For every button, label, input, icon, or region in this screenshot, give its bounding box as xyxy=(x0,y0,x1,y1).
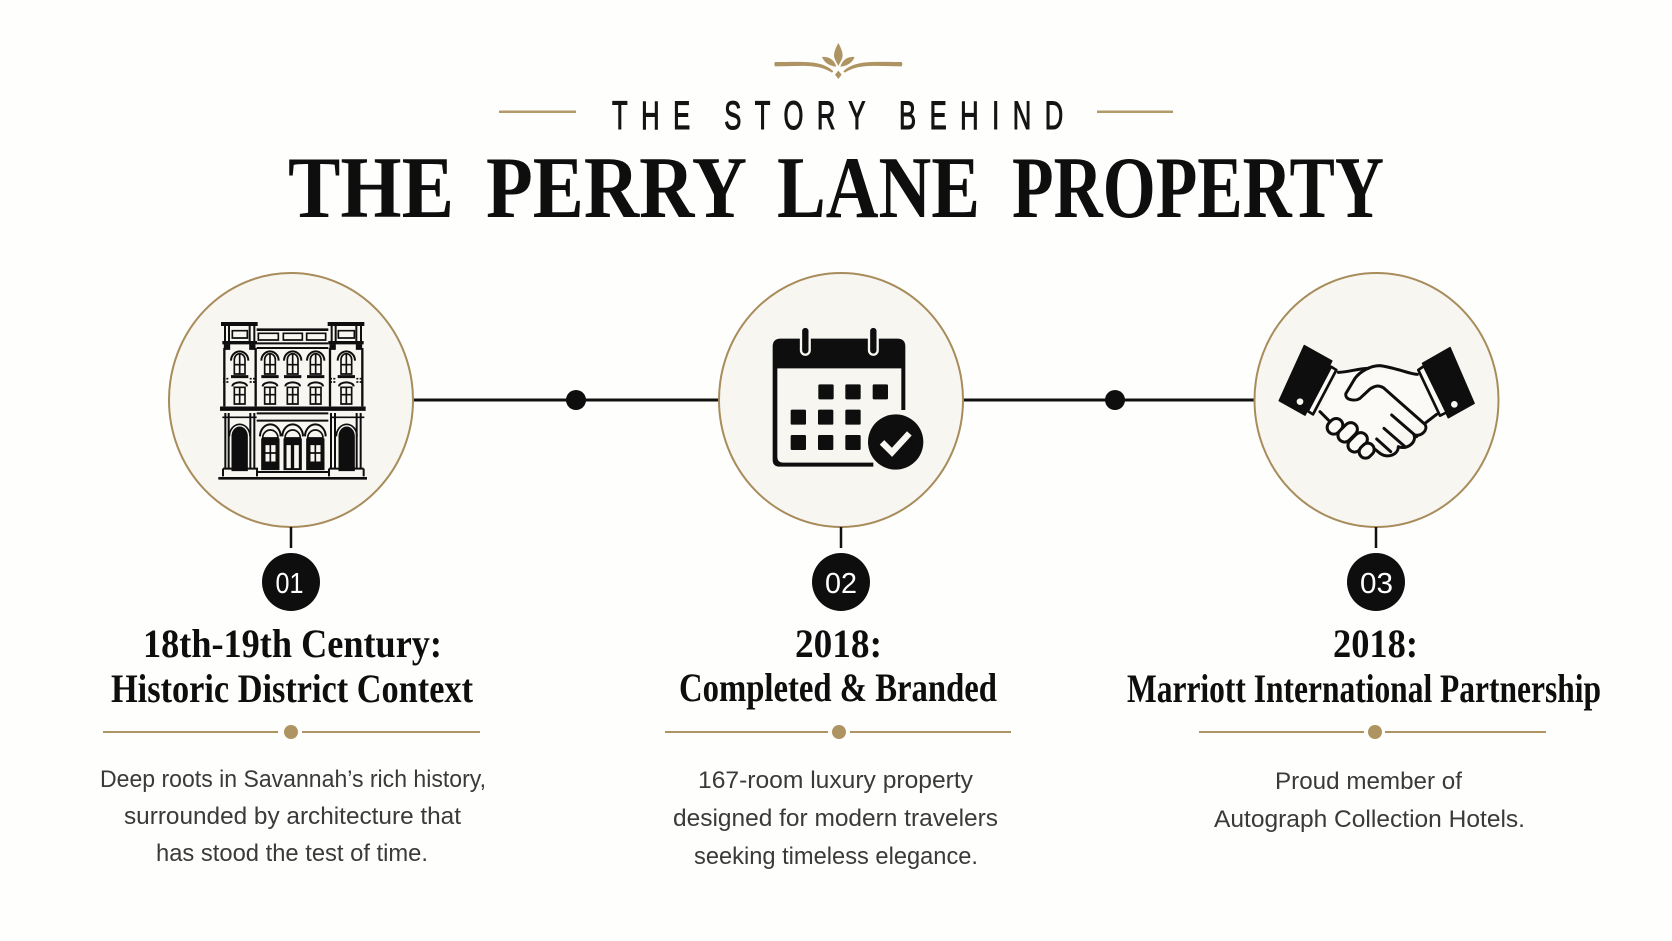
heading xyxy=(111,621,474,711)
panel: step 3 marriott partnership xyxy=(1127,273,1601,833)
icon circle: building xyxy=(169,273,413,527)
title: THE xyxy=(288,140,454,237)
description: surrounded by architecture that xyxy=(124,803,461,830)
description xyxy=(1214,768,1525,833)
icon circle: handshake xyxy=(1254,273,1498,527)
description: seeking timeless elegance. xyxy=(694,843,978,870)
description xyxy=(673,767,998,870)
divider xyxy=(103,725,480,739)
icon circle: calendar xyxy=(719,273,963,527)
number badge 02: 02 xyxy=(825,568,857,600)
timeline connector xyxy=(413,390,1255,410)
panel: step 2 completed and branded xyxy=(665,273,1011,870)
heading: Completed & Branded xyxy=(679,665,997,710)
ornament: gold flourish xyxy=(774,43,902,79)
heading: 2018: xyxy=(795,621,882,666)
description: 167-room luxury property xyxy=(698,767,973,794)
heading: 18th-19th Century: xyxy=(143,621,442,666)
divider xyxy=(665,725,1011,739)
step connector xyxy=(1375,527,1377,548)
title: PROPERTY xyxy=(1012,140,1384,237)
number badge 03 xyxy=(1347,553,1405,611)
heading: 2018: xyxy=(1333,621,1418,666)
description: Proud member of xyxy=(1275,768,1462,795)
heading: Historic District Context xyxy=(111,666,474,711)
divider xyxy=(1199,725,1546,739)
number badge 01 xyxy=(262,553,320,611)
panel: step 1 historic district xyxy=(100,273,486,867)
step connector xyxy=(840,527,842,548)
step connector xyxy=(290,527,292,548)
description: Deep roots in Savannah’s rich history, xyxy=(100,766,486,793)
title: LANE xyxy=(777,140,980,237)
number badge 03: 03 xyxy=(1360,568,1393,600)
title xyxy=(288,140,1384,237)
subtitle: the story behind: THE STORY BEHIND xyxy=(612,94,1063,139)
heading xyxy=(679,621,997,710)
number badge 02 xyxy=(812,553,870,611)
number badge 01: 01 xyxy=(276,568,304,600)
heading xyxy=(1127,621,1601,711)
description xyxy=(100,766,486,867)
description: designed for modern travelers xyxy=(673,805,998,832)
title: PERRY xyxy=(486,140,747,237)
description: Autograph Collection Hotels. xyxy=(1214,806,1525,833)
description: has stood the test of time. xyxy=(156,840,428,867)
